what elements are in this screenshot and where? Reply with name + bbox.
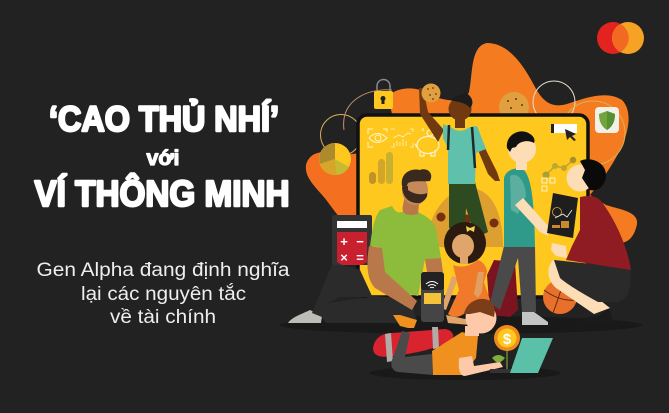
subtitle line 1: Gen Alpha đang định nghĩa [36, 260, 290, 281]
logo: overlapping circles [597, 22, 644, 54]
dress [448, 260, 490, 317]
arm right [474, 272, 484, 298]
calculator minus: − [356, 234, 364, 249]
subtitle [36, 260, 290, 328]
beard [402, 186, 427, 203]
head [402, 175, 428, 205]
raised arm [419, 88, 444, 142]
head [566, 164, 594, 192]
orange background blob [388, 43, 637, 243]
leg [548, 260, 610, 314]
figure: seated man [288, 169, 443, 323]
cookie in hand [422, 84, 440, 102]
icon: piggy bank [415, 128, 439, 156]
figure: crouching woman [548, 159, 631, 325]
icon: wifi [426, 282, 438, 288]
shoes [578, 308, 614, 325]
big cookie behind figures [427, 188, 503, 247]
pants [312, 262, 417, 323]
calculator times: × [340, 250, 348, 265]
icon: padlock [374, 80, 393, 109]
tablet [547, 193, 578, 238]
figure: lying child [373, 299, 553, 376]
ground shadows [280, 316, 642, 380]
heading line 1: ‘CAO THỦ NHÍ’ [49, 99, 279, 139]
title block [34, 99, 290, 214]
orange left blob [306, 152, 362, 226]
cookie behind screen [499, 92, 529, 122]
heading connector: với [146, 147, 180, 170]
icon: shield card [595, 107, 619, 133]
head [466, 302, 496, 334]
face [452, 234, 474, 258]
hair [464, 299, 495, 317]
shoe [288, 310, 322, 323]
icon: eye [368, 129, 387, 147]
shirt [432, 332, 478, 375]
laptop [490, 338, 553, 373]
shirt [504, 168, 535, 247]
pants [449, 182, 488, 238]
bar chart [369, 152, 393, 184]
legs [446, 315, 470, 325]
neck [403, 195, 420, 215]
arm [367, 246, 417, 310]
calculator plus: + [340, 234, 348, 249]
icon: pie chart [319, 143, 351, 175]
icon: line chart [391, 129, 413, 147]
thin decorative circles [320, 81, 625, 165]
hair [444, 222, 486, 264]
forearm [459, 356, 503, 376]
skirt [554, 260, 631, 302]
pants [490, 246, 536, 312]
red top [566, 196, 631, 270]
search bar and cursor [551, 124, 577, 141]
bow [466, 226, 475, 232]
screen panel [358, 115, 588, 297]
backpack red [487, 260, 518, 317]
skateboard [373, 327, 453, 362]
basketball [543, 280, 577, 314]
screen icons [368, 124, 577, 191]
far arm [425, 258, 443, 272]
subtitle line 2: lại các nguyên tắc [81, 283, 246, 305]
neck and head [507, 131, 536, 170]
bank card [424, 293, 441, 304]
backpack straps [448, 125, 475, 168]
tablet chart icon [552, 208, 572, 228]
shirt [370, 206, 441, 296]
subtitle line 3: về tài chính [110, 307, 216, 328]
shoe [522, 312, 548, 325]
lowering arm [478, 148, 500, 181]
shirt [443, 124, 486, 184]
arm [515, 198, 550, 236]
calculator equals: = [356, 250, 364, 265]
hand [551, 243, 567, 258]
heading line 2: VÍ THÔNG MINH [34, 172, 290, 214]
dollar sign: $ [503, 331, 512, 348]
figure: girl [441, 222, 490, 325]
arm left [441, 276, 458, 310]
phone [421, 272, 444, 322]
hair [580, 159, 606, 190]
figure: boy with cookie [419, 84, 500, 238]
illustration [280, 43, 642, 380]
leg raised [391, 331, 433, 375]
icon: network dots [542, 157, 576, 191]
shoe [393, 315, 417, 328]
figure: standing boy [490, 131, 550, 325]
head [448, 98, 472, 120]
hair [450, 92, 472, 108]
icon: money plant [492, 325, 520, 369]
hair [402, 169, 431, 190]
sleeve [510, 175, 526, 214]
calculator [332, 215, 372, 265]
